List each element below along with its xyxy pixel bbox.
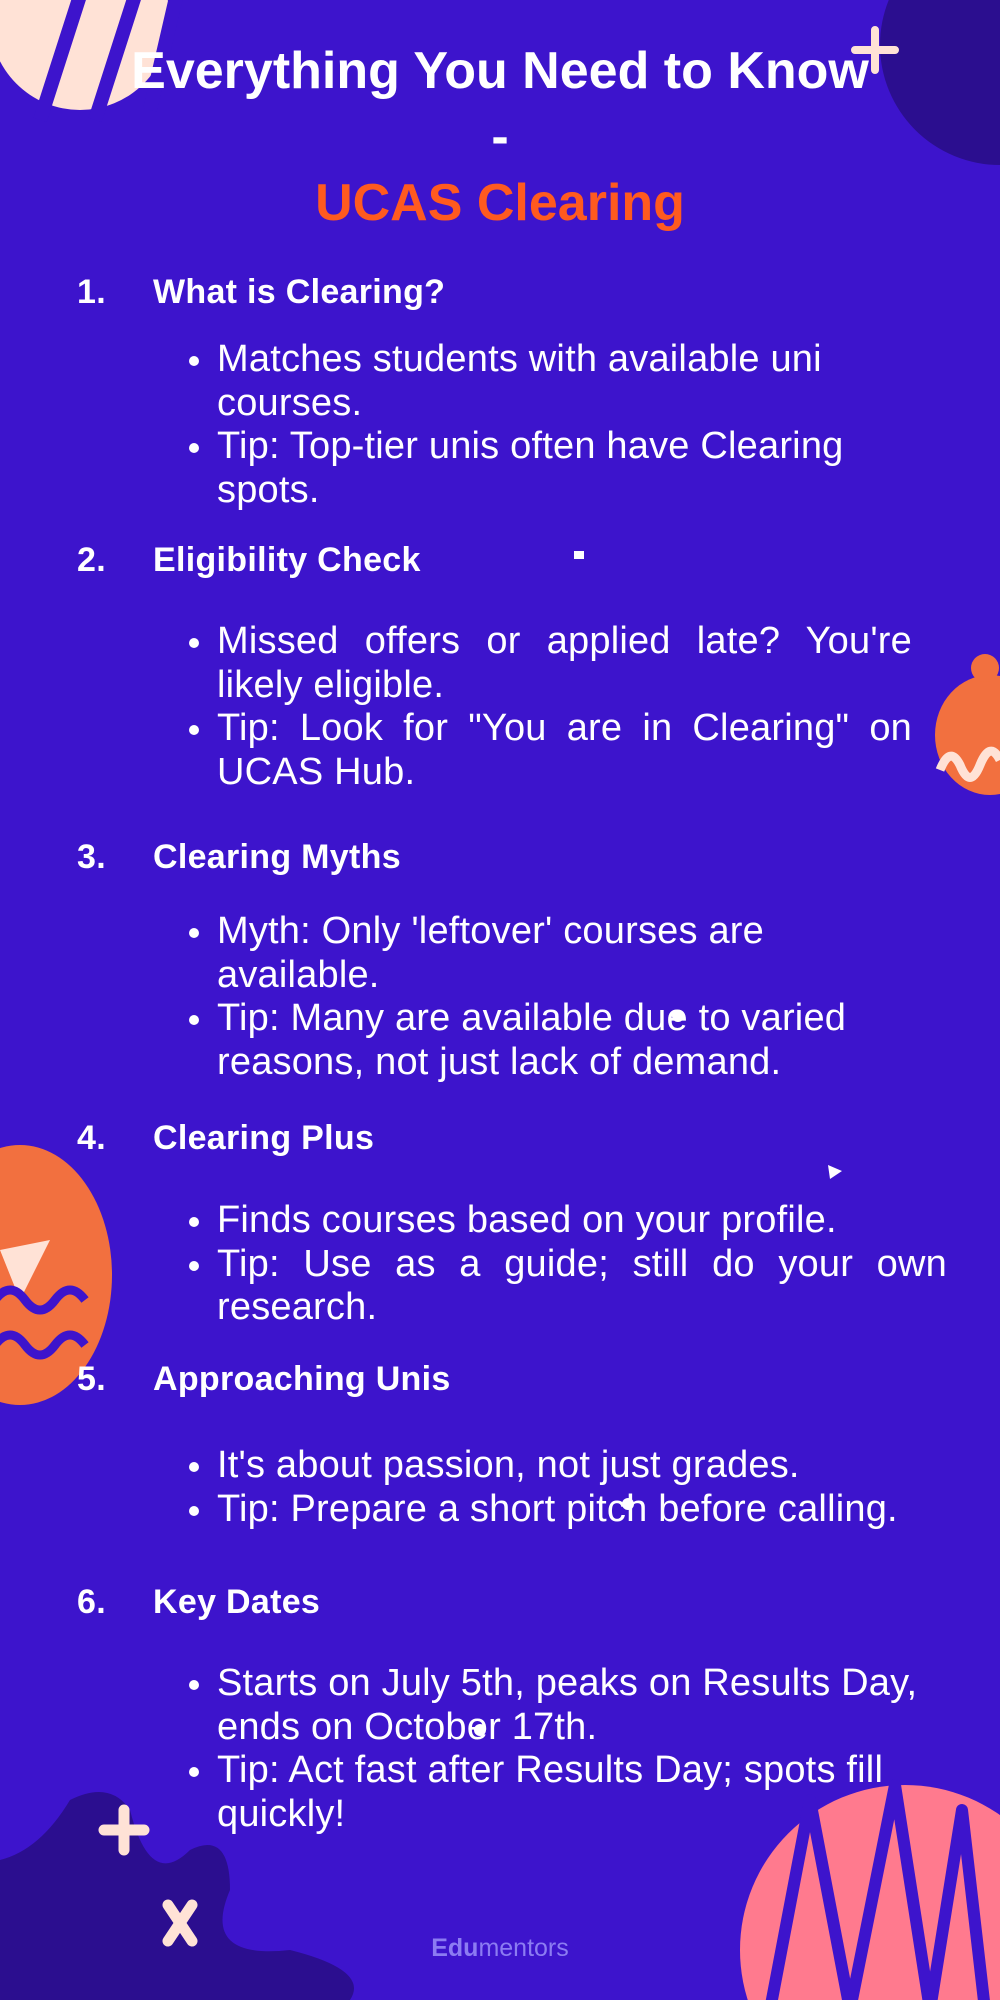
- text block 3: Tip: Many are available due to varied: [217, 997, 846, 1039]
- text block 5: It's about passion, not just grades.: [217, 1444, 800, 1486]
- text: 3.: [77, 838, 106, 876]
- text block 4: [189, 1199, 947, 1328]
- text block 6: Starts on July 5th, peaks on Results Day,: [217, 1662, 917, 1704]
- text block 6: ends on October 17th.: [217, 1706, 597, 1748]
- small confetti: [474, 551, 842, 1736]
- footer logo: Edumentors: [431, 1934, 569, 1962]
- text block 2: [189, 620, 912, 792]
- title: Everything You Need to Know: [131, 42, 869, 100]
- shape: left orange blob: [0, 1145, 112, 1405]
- text block 2: likely eligible.: [217, 664, 444, 706]
- heading 1: [77, 273, 445, 311]
- text: Clearing Myths: [153, 838, 401, 876]
- text: 2.: [77, 541, 106, 579]
- text: 5.: [77, 1360, 106, 1398]
- text: Key Dates: [153, 1583, 320, 1621]
- text block 1: courses.: [217, 382, 362, 424]
- shape: top-right dark circle: [855, 0, 1000, 165]
- shape: bottom-left dark blob: [0, 1792, 354, 2000]
- text block 5: [189, 1444, 898, 1530]
- text block 6: [189, 1662, 917, 1834]
- heading 5: [77, 1360, 451, 1398]
- text block 1: Tip: Top-tier unis often have Clearing: [217, 425, 844, 467]
- text block 1: [189, 338, 844, 510]
- title: [131, 42, 869, 232]
- text block 6: quickly!: [217, 1792, 345, 1834]
- text block 5: Tip: Prepare a short pitch before calling.: [217, 1488, 898, 1530]
- heading 2: [77, 541, 421, 579]
- text block 3: [189, 910, 846, 1082]
- text: What is Clearing?: [153, 273, 445, 311]
- shape: top-left peach circle with stripes: [0, 0, 180, 120]
- text: 6.: [77, 1583, 106, 1621]
- text block 1: Matches students with available uni: [217, 338, 822, 380]
- text: 1.: [77, 273, 106, 311]
- heading 3: [77, 838, 401, 876]
- text: Eligibility Check: [153, 541, 421, 579]
- text block 3: available.: [217, 954, 380, 996]
- heading 4: [77, 1119, 374, 1157]
- text block 1: spots.: [217, 468, 320, 510]
- shape: right orange blob: [935, 654, 1000, 795]
- title: -: [491, 108, 509, 166]
- title: UCAS Clearing: [315, 174, 685, 232]
- text: Approaching Unis: [153, 1360, 451, 1398]
- text block 4: Finds courses based on your profile.: [217, 1199, 837, 1241]
- text block 2: Missed offers or applied late? You're: [217, 620, 912, 662]
- text: Clearing Plus: [153, 1119, 374, 1157]
- text block 3: reasons, not just lack of demand.: [217, 1040, 781, 1082]
- text: 4.: [77, 1119, 106, 1157]
- text block 3: Myth: Only 'leftover' courses are: [217, 910, 764, 952]
- text block 2: Tip: Look for "You are in Clearing" on: [217, 707, 912, 749]
- shape: bottom-right pink circle: [740, 1785, 1000, 2000]
- text block 6: Tip: Act fast after Results Day; spots fill: [217, 1749, 883, 1791]
- text block 4: research.: [217, 1286, 377, 1328]
- heading 6: [77, 1583, 320, 1621]
- text block 4: Tip: Use as a guide; still do your own: [217, 1242, 947, 1284]
- text block 2: UCAS Hub.: [217, 750, 415, 792]
